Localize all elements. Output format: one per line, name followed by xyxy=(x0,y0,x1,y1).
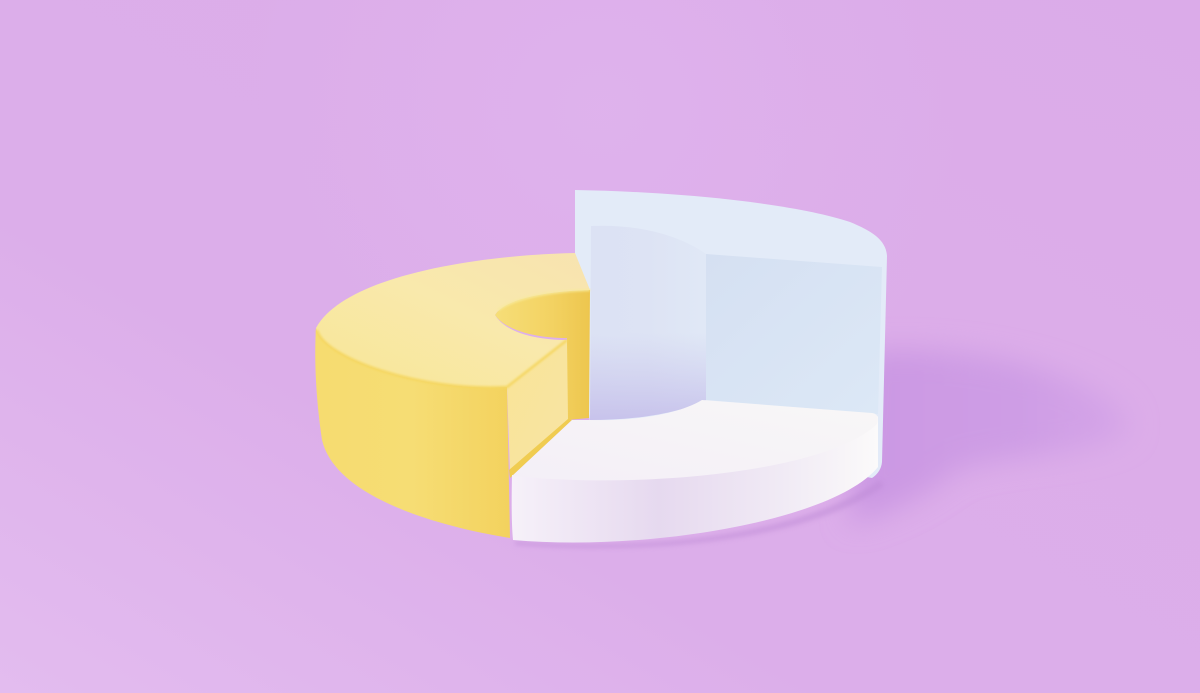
blue cylindrical inner wall xyxy=(590,226,706,420)
yellow cut face xyxy=(507,340,568,472)
blue top face and outer shell xyxy=(575,190,887,478)
yellow top edge highlights xyxy=(317,330,567,387)
slice: yellow xyxy=(315,253,590,538)
yellow bottom sliver xyxy=(509,419,572,478)
slice: white xyxy=(512,400,878,543)
slice: blue xyxy=(575,190,887,478)
yellow outer side xyxy=(315,328,510,538)
yellow inner wall xyxy=(495,290,590,420)
yellow hole rim xyxy=(498,290,590,310)
blue right wall xyxy=(706,254,882,414)
white top face xyxy=(512,400,878,480)
white outer side xyxy=(512,416,878,543)
cast shadow xyxy=(515,350,1130,548)
yellow top face xyxy=(316,253,590,387)
